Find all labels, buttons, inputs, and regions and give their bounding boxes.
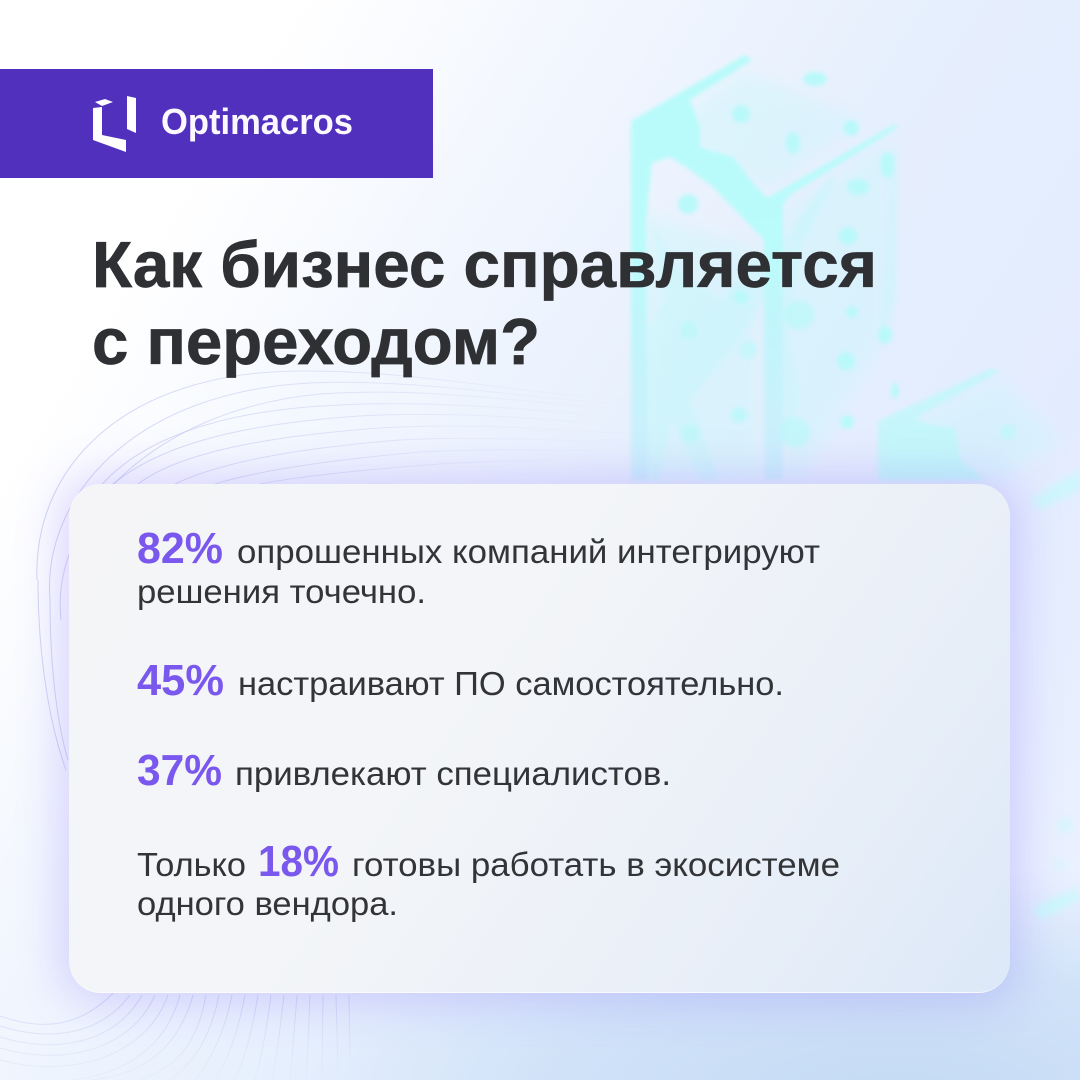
stat: 37%: привлекают специалистов. <box>235 755 671 792</box>
stat: 18%: Только <box>137 846 246 883</box>
stat: 18%: 18% <box>258 837 339 886</box>
stat: 82%: решения точечно. <box>137 573 426 610</box>
stat: 45%: 45% <box>137 656 224 705</box>
stat: 37% <box>137 746 671 795</box>
stat: 45% <box>137 656 784 705</box>
icon: logo mark <box>93 96 136 152</box>
stat: 18%: одного вендора. <box>137 885 398 922</box>
title: Как бизнес справляется <box>92 228 877 301</box>
background: contour lines <box>37 371 660 770</box>
stat: 37%: 37% <box>137 746 222 795</box>
stat: 82%: опрошенных компаний интегрируют <box>237 533 820 570</box>
stat: 18% <box>137 837 840 922</box>
haze inside cubes <box>640 70 1060 480</box>
panel: statistics card <box>69 484 1010 993</box>
stat: 82%: 82% <box>137 524 223 573</box>
panel: logo banner <box>0 69 433 178</box>
title <box>92 228 877 378</box>
stat: 18%: готовы работать в экосистеме <box>352 846 840 883</box>
logo: Optimacros <box>93 96 353 152</box>
stat: 82% <box>137 524 820 610</box>
title: с переходом? <box>92 305 540 378</box>
logo wordmark: Optimacros <box>161 101 353 142</box>
stat: 45%: настраивают ПО самостоятельно. <box>238 665 784 702</box>
